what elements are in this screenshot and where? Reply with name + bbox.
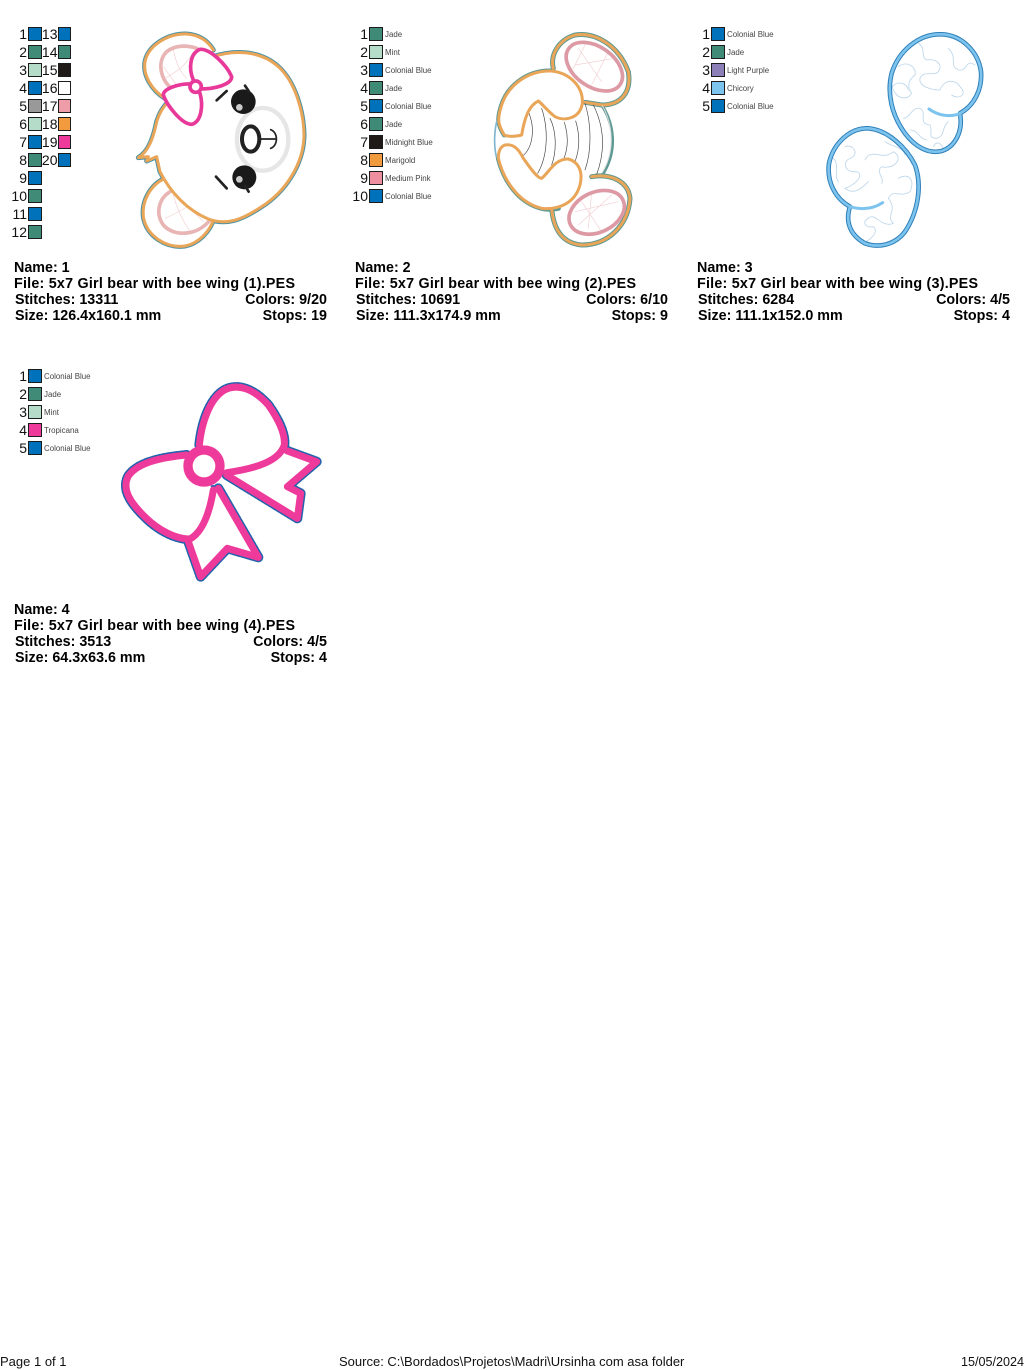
design 1 details: Name: 1 [14,260,70,276]
color legend: design 2: 5 [360,98,368,114]
color legend: design 2: Jade [385,30,403,39]
color legend: design 2: Colonial Blue [385,102,432,111]
color legend: design 2: 4 [360,80,368,96]
color legend: design 1: 20 [42,152,58,168]
design 3 details: Name: 3 [697,260,753,276]
design 1 details: Stops: 19 [263,308,327,324]
design 1 details [14,260,327,324]
design 3 details: Colors: 4/5 [936,292,1010,308]
panel: design 3 [697,26,1010,324]
color legend: design 3 [702,26,774,114]
color legend: design 2: Jade [385,84,403,93]
color legend: design 1: 8 [19,152,27,168]
color legend: design 1: 19 [42,134,58,150]
design 4 details [14,602,327,666]
design 3 details: Size: 111.1x152.0 mm [698,308,843,324]
design 2 details: Stops: 9 [612,308,668,324]
color legend: design 1: 7 [19,134,27,150]
color legend: design 3: Colonial Blue [727,30,774,39]
color legend: design 2: 7 [360,134,368,150]
design 1 details: Colors: 9/20 [245,292,327,308]
color legend: design 1: 14 [42,44,58,60]
design 3 details: Stops: 4 [954,308,1010,324]
color legend: design 2: 6 [360,116,368,132]
footer: Source: C:\Bordados\Projetos\Madri\Ursinha com asa folder [339,1354,685,1369]
color legend: design 2: 8 [360,152,368,168]
design 4 details: Stops: 4 [271,650,327,666]
panel: design 2 [352,26,668,324]
color legend: design 4: 5 [19,440,27,456]
color legend: design 3: 1 [702,26,710,42]
panel: design 1 [11,26,327,324]
design 3 details: File: 5x7 Girl bear with bee wing (3).PES [697,276,978,292]
footer: 15/05/2024 [961,1355,1024,1369]
color legend: design 3: 2 [702,44,710,60]
color legend: design 1: 3 [19,62,27,78]
embroidery: bee wings [829,34,981,246]
color legend: design 3: Light Purple [727,66,770,75]
design 2 details: File: 5x7 Girl bear with bee wing (2).PES [355,276,636,292]
color legend: design 1: 2 [19,44,27,60]
design 4 details: Size: 64.3x63.6 mm [15,650,145,666]
design 2 details: Stitches: 10691 [356,292,460,308]
color legend: design 4 [19,368,91,456]
color legend: design 1: 11 [12,206,27,222]
color legend: design 2: 9 [360,170,368,186]
color legend: design 3: Colonial Blue [727,102,774,111]
panel: design 4 [14,368,327,666]
color legend: design 3: 3 [702,62,710,78]
footer: Page 1 of 1 [0,1354,66,1369]
color legend: design 2: Colonial Blue [385,192,432,201]
color legend: design 1: 5 [19,98,27,114]
color legend: design 2: Mint [385,48,401,57]
color legend: design 2: Marigold [385,156,415,165]
design 2 details: Name: 2 [355,260,411,276]
design 1 details: Stitches: 13311 [15,292,118,308]
color legend: design 3: 4 [702,80,710,96]
color legend: design 1 [11,26,70,240]
color legend: design 4: 4 [19,422,27,438]
color legend: design 3: Chicory [727,84,754,93]
color legend: design 4: Tropicana [44,426,79,435]
color legend: design 2: 2 [360,44,368,60]
design 3 details [697,260,1010,324]
color legend: design 1: 1 [19,26,27,42]
design 4 details: File: 5x7 Girl bear with bee wing (4).PES [14,618,295,634]
color legend: design 1: 12 [11,224,27,240]
color legend: design 1: 15 [42,62,58,78]
color legend: design 2: Colonial Blue [385,66,432,75]
design 2 details: Colors: 6/10 [586,292,668,308]
design 4 details: Stitches: 3513 [15,634,111,650]
color legend: design 4: 3 [19,404,27,420]
color legend: design 1: 18 [42,116,58,132]
color legend: design 3: 5 [702,98,710,114]
design 1 details: Size: 126.4x160.1 mm [15,308,161,324]
color legend: design 2: Jade [385,120,403,129]
color legend: design 1: 13 [42,26,58,42]
color legend: design 1: 6 [19,116,27,132]
color legend: design 4: Jade [44,390,62,399]
color legend: design 1: 10 [11,188,27,204]
design 4 details: Name: 4 [14,602,70,618]
design 1 details: File: 5x7 Girl bear with bee wing (1).PES [14,276,295,292]
color legend: design 1: 17 [42,98,58,114]
embroidery: bear body [495,32,631,245]
color legend: design 2: 1 [360,26,368,42]
color legend: design 1: 9 [19,170,27,186]
color legend: design 1: 16 [42,80,58,96]
color legend: design 4: Colonial Blue [44,444,91,453]
color legend: design 2: 3 [360,62,368,78]
design 2 details: Size: 111.3x174.9 mm [356,308,501,324]
footer [0,1354,1024,1369]
color legend: design 1: 4 [19,80,27,96]
design 4 details: Colors: 4/5 [253,634,327,650]
embroidery: bear face [138,34,304,246]
color legend: design 4: 1 [19,368,27,384]
color legend: design 4: Colonial Blue [44,372,91,381]
embroidery: pink bow [126,387,317,577]
color legend: design 4: 2 [19,386,27,402]
color legend: design 3: Jade [727,48,745,57]
design 3 details: Stitches: 6284 [698,292,794,308]
color legend: design 2: 10 [352,188,368,204]
design 2 details [355,260,668,324]
color legend: design 2: Medium Pink [385,174,431,183]
color legend: design 2: Midnight Blue [385,138,433,147]
color legend: design 4: Mint [44,408,60,417]
color legend: design 2 [352,26,433,204]
